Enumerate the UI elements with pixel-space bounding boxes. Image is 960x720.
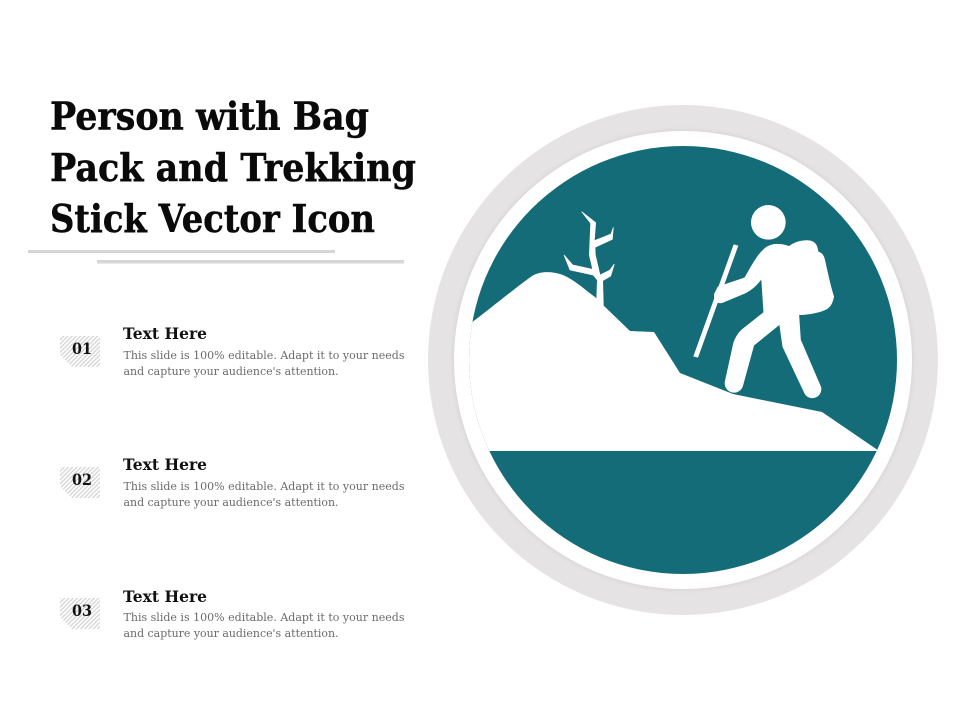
description 02	[124, 480, 405, 509]
description 01: This slide is 100% editable. Adapt it to your needs	[124, 349, 405, 362]
item 03	[60, 587, 405, 640]
description 03: and capture your audience's attention.	[124, 627, 338, 640]
title underline rules	[28, 250, 404, 264]
number badge 02	[60, 467, 100, 498]
number badge 02: 02	[72, 470, 92, 489]
bare tree	[564, 212, 614, 305]
trekking stick	[693, 244, 738, 358]
title: Pack and Trekking	[50, 146, 416, 191]
number badge 01	[60, 336, 100, 367]
item 01	[60, 324, 405, 378]
title	[50, 94, 416, 242]
description 02: This slide is 100% editable. Adapt it to your needs	[124, 480, 405, 493]
white ring	[454, 131, 912, 589]
description 03: This slide is 100% editable. Adapt it to your needs	[124, 611, 405, 624]
outer grey ring	[428, 105, 938, 615]
head	[751, 205, 786, 240]
number badge 03	[60, 598, 100, 629]
description 01	[124, 349, 405, 378]
backpack	[780, 240, 834, 315]
heading 02: Text Here	[123, 455, 207, 474]
description 02: and capture your audience's attention.	[124, 496, 338, 509]
item 02	[60, 455, 405, 509]
number badge 03: 03	[72, 601, 92, 620]
description 01: and capture your audience's attention.	[124, 365, 338, 378]
circular illustration	[428, 105, 938, 615]
description 03	[124, 611, 405, 640]
hiker	[693, 205, 834, 397]
body with arm and legs	[715, 245, 820, 397]
teal disc	[469, 146, 897, 574]
heading 03: Text Here	[123, 587, 207, 606]
heading 01: Text Here	[123, 324, 207, 343]
mountain	[469, 272, 878, 451]
number badge 01: 01	[72, 339, 92, 358]
title: Person with Bag	[50, 94, 369, 140]
title: Stick Vector Icon	[50, 197, 375, 242]
